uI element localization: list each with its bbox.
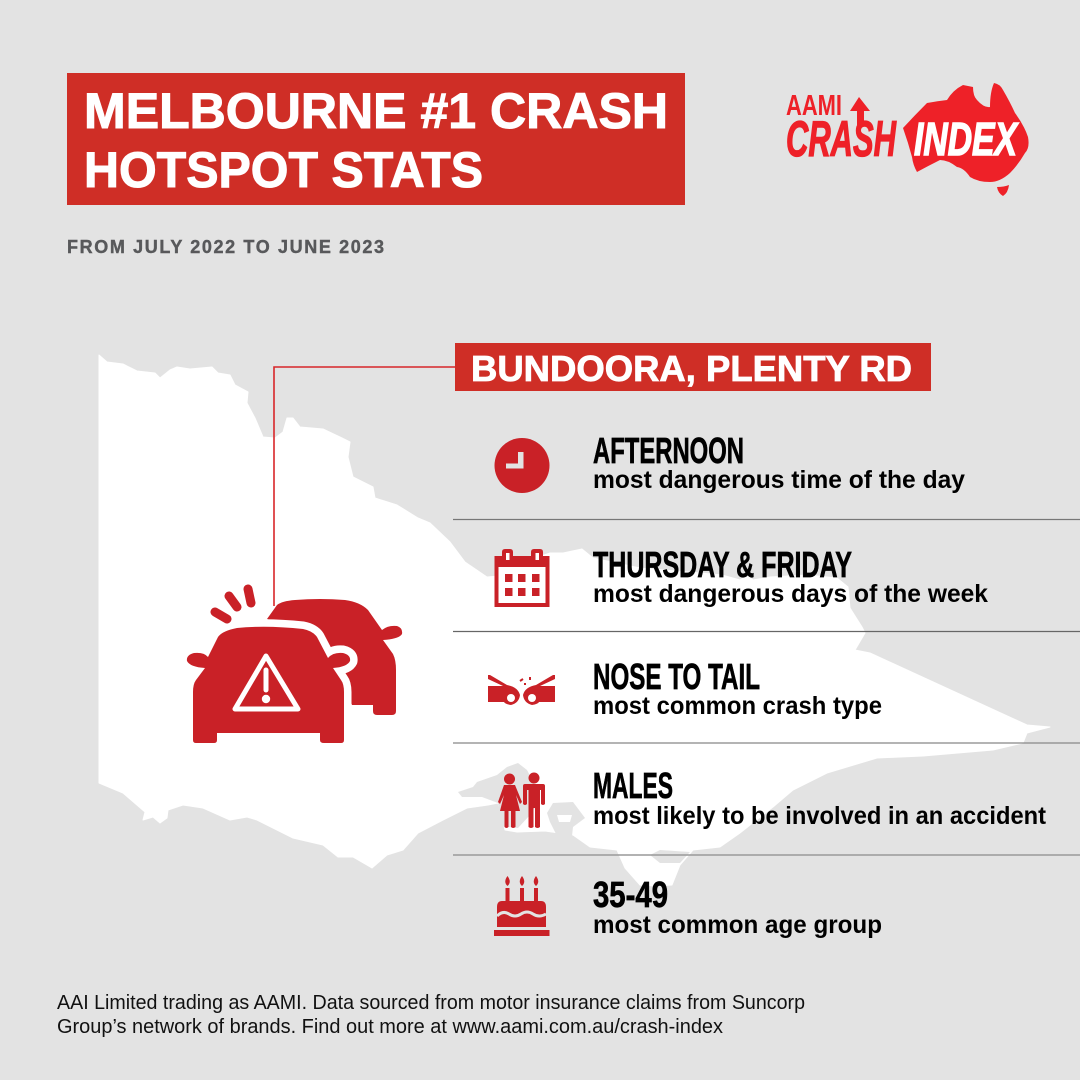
icon: nose to tail crash [488, 675, 555, 705]
text: males [593, 765, 1047, 830]
icon: woman and man [498, 772, 545, 828]
text: 35-49 [593, 874, 882, 939]
text: Thursday and Friday: most dangerous days of the week [593, 580, 988, 608]
text: nose to tail [593, 656, 882, 720]
title banner: HOTSPOT STATS [84, 142, 483, 198]
footer source note: AAI Limited trading as AAMI. Data sourced from motor insurance claims from Suncorp [57, 992, 805, 1014]
text: nose to tail: NOSE TO TAIL [593, 656, 760, 697]
location heading: BUNDOORA, PLENTY RD [471, 348, 912, 389]
title banner [67, 73, 685, 205]
text: males: most likely to be involved in an accident [593, 802, 1047, 830]
row: age group [494, 874, 882, 939]
AAMI Crash Index logo: INDEX [914, 113, 1019, 165]
row: crash type [488, 656, 882, 720]
icon: calendar [494, 549, 550, 607]
footer source note: Group’s network of brands. Find out more at www.aami.com.au/crash-index [57, 1016, 723, 1038]
row: gender [498, 765, 1047, 830]
text: afternoon [593, 430, 965, 494]
AAMI Crash Index logo: CRASH [786, 111, 897, 167]
date range subtitle: FROM JULY 2022 TO JUNE 2023 [67, 237, 384, 257]
AAMI Crash Index logo: AAMI [786, 90, 842, 122]
AAMI Crash Index logo [786, 83, 1029, 196]
text: afternoon: AFTERNOON [593, 430, 744, 471]
leader line from hotspot to location label [274, 367, 455, 606]
text: nose to tail: most common crash type [593, 692, 882, 720]
warning triangle [235, 656, 298, 709]
row: time of day [494, 430, 965, 494]
icon: birthday cake [494, 876, 550, 936]
title banner: MELBOURNE #1 CRASH [84, 83, 668, 139]
impact marks [215, 589, 251, 619]
footer source note [57, 992, 805, 1038]
text: 35-49: most common age group [593, 911, 882, 939]
map of Victoria [99, 355, 1050, 886]
icon: clock [494, 438, 550, 493]
text: 35-49: 35-49 [593, 874, 668, 915]
rear car [267, 599, 402, 715]
text: Thursday and Friday: THURSDAY & FRIDAY [593, 544, 852, 585]
text: Thursday and Friday [593, 544, 988, 608]
icon: two crashed cars with warning triangle [187, 589, 402, 743]
row: days of the week [494, 544, 988, 608]
front car [187, 627, 350, 743]
text: afternoon: most dangerous time of the day [593, 466, 965, 494]
text: males: MALES [593, 765, 673, 806]
